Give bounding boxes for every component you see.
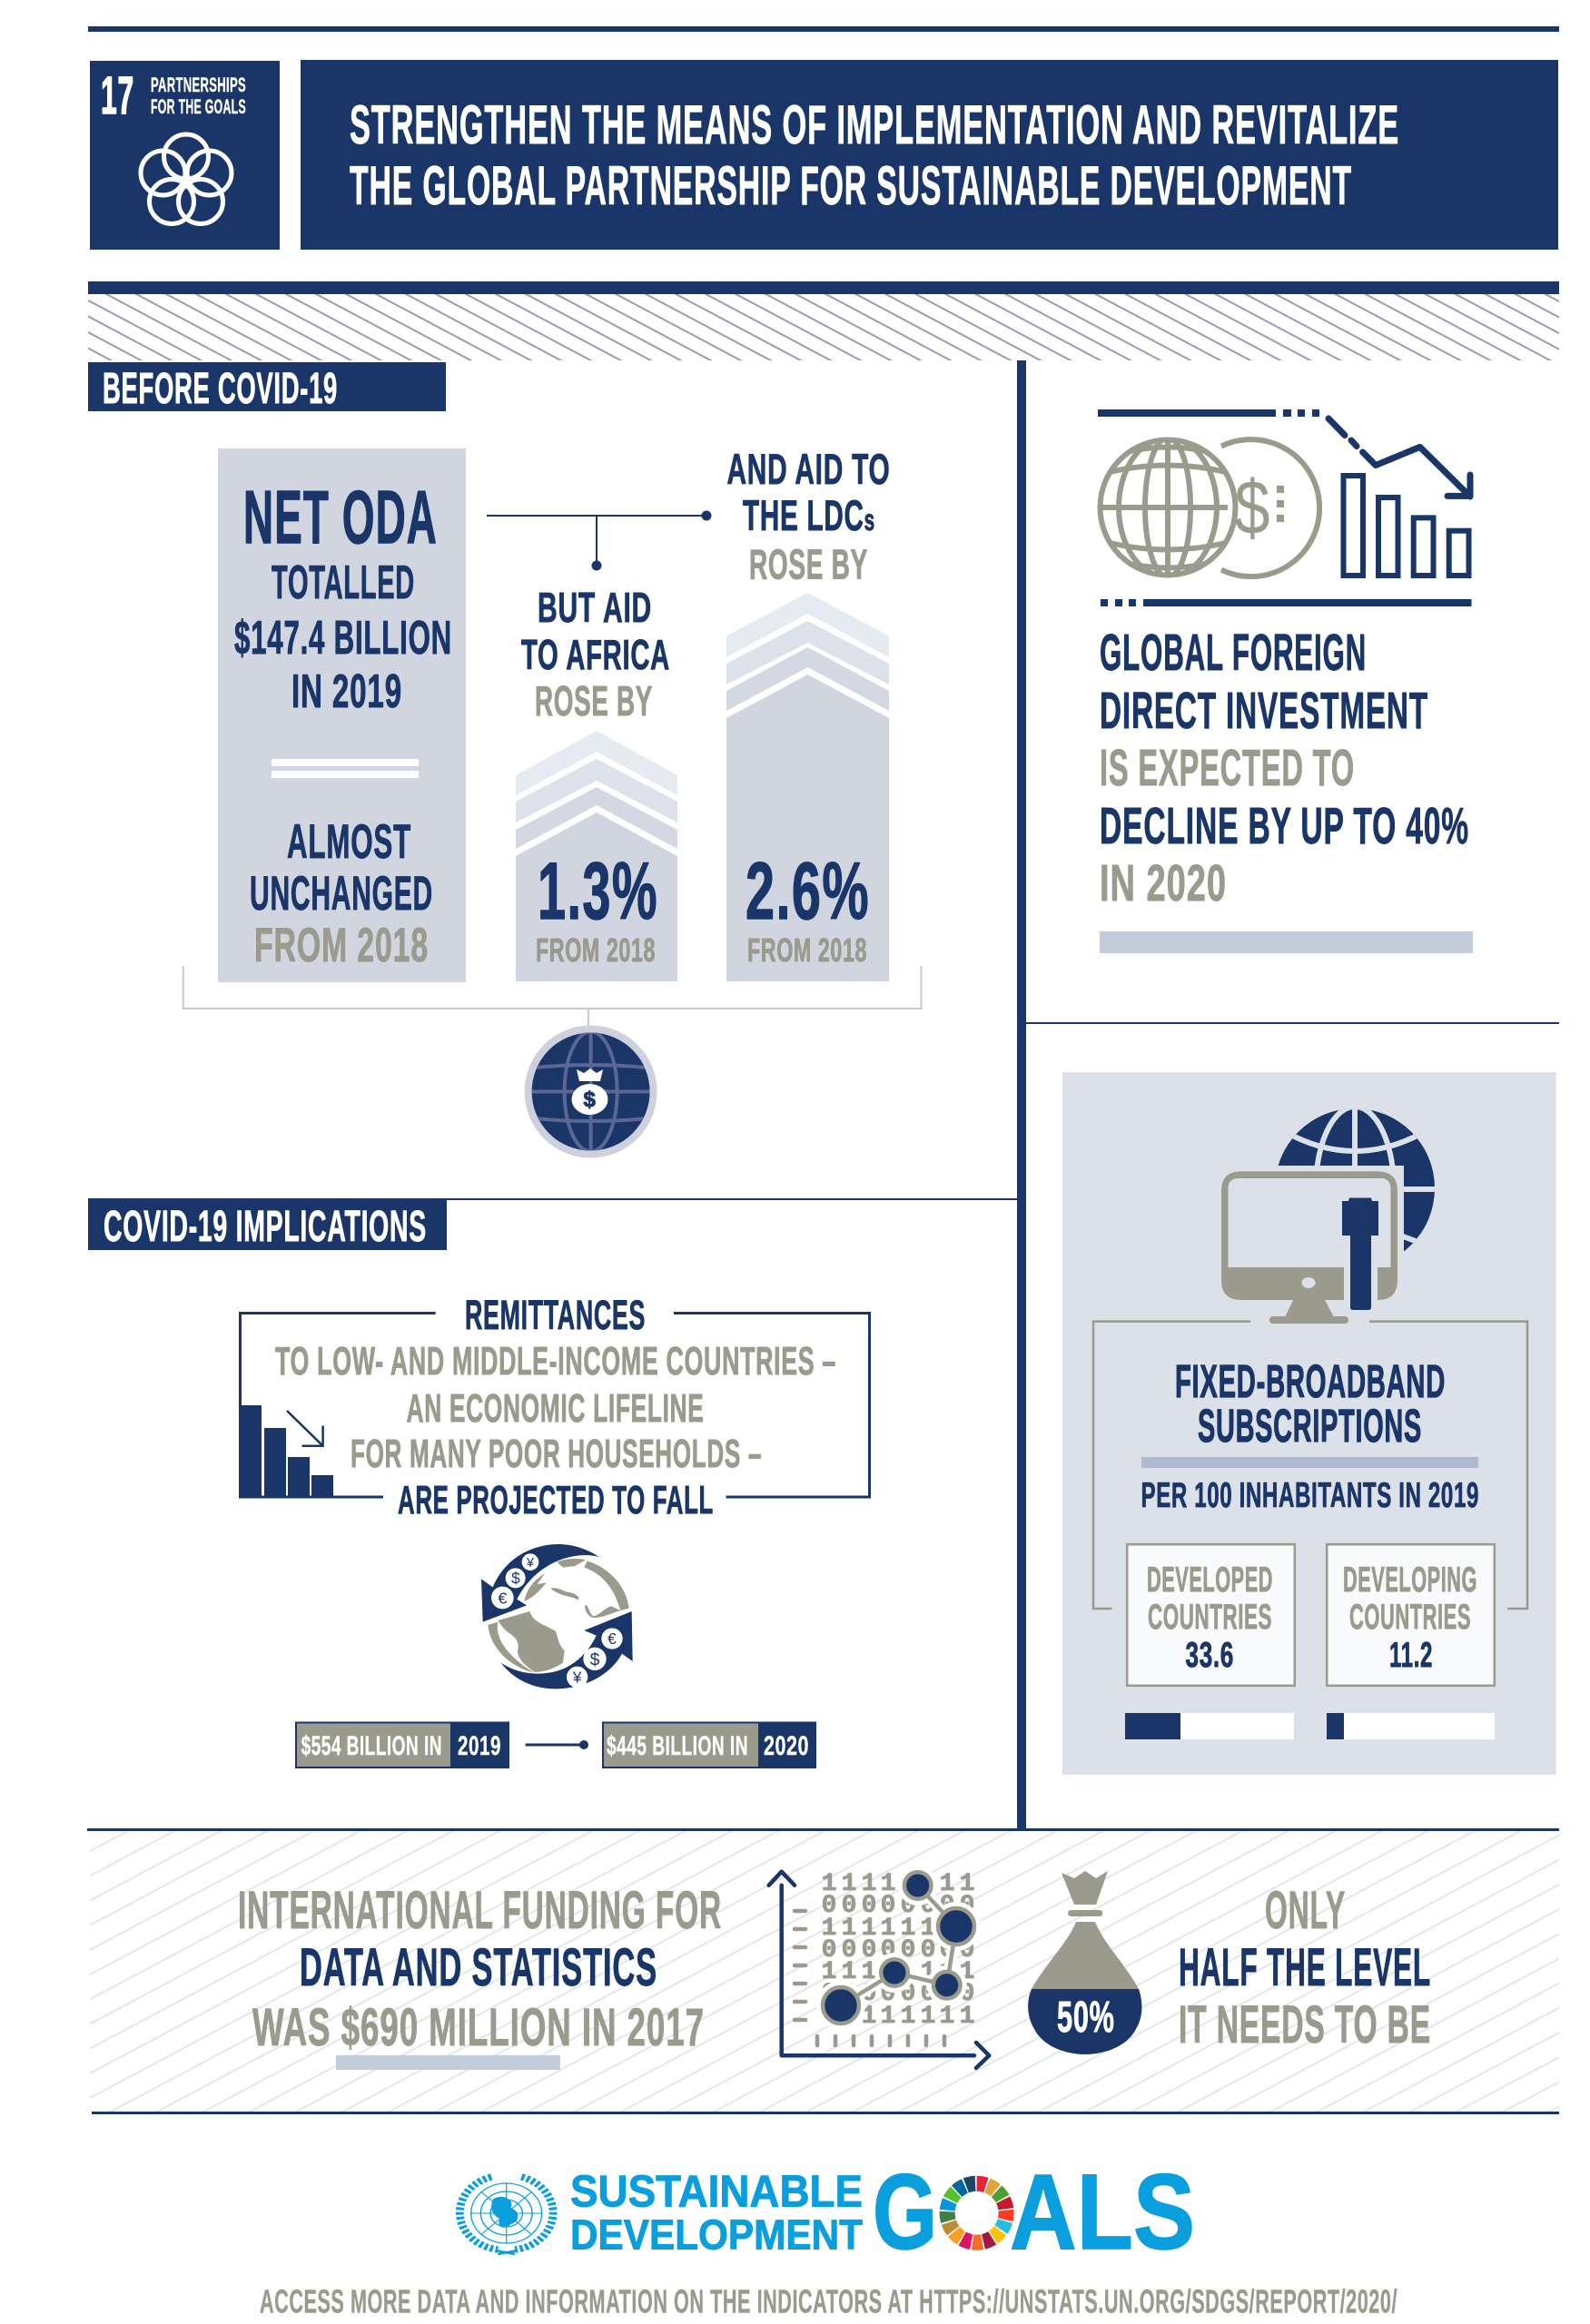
goal name — [151, 74, 246, 118]
icon: falling bars with arrow — [239, 1405, 333, 1498]
text: international funding: INTERNATIONAL FUNDING FOR — [238, 1881, 722, 1940]
panel: net oda: IN 2019 — [291, 665, 402, 718]
icon: fdi chart with globe and coin: $ — [1235, 465, 1269, 550]
card: developed countries: 33.6 — [1186, 1636, 1234, 1675]
arrow column: africa 1.3%: 1.3% — [538, 845, 658, 936]
icon: globe with circular currency arrows: ¥ — [526, 1556, 535, 1571]
heading: fixed-broadband subscriptions: SUBSCRIPTIONS — [1198, 1400, 1422, 1452]
progress bar: developing — [1327, 1713, 1495, 1739]
goal 17 badge — [90, 61, 280, 250]
icon: globe behind monitor with plug — [1219, 1107, 1439, 1324]
icon: data chart — [769, 1866, 989, 2068]
text: foreign direct investment: IS EXPECTED TO — [1100, 739, 1355, 797]
column heading: aid to the ldcs: AND AID TO — [726, 445, 890, 493]
icon: data chart: 00000000 — [822, 1980, 974, 2008]
column heading: aid to africa — [521, 584, 670, 724]
column heading: aid to the ldcs: THE LDCs — [743, 491, 875, 539]
goal number: 17 — [101, 66, 134, 125]
arrow column: ldcs 2.6% — [726, 593, 889, 981]
section label: before covid-19: BEFORE COVID-19 — [103, 365, 338, 413]
icon: globe with money bag — [528, 1029, 654, 1155]
icon: data chart: 11111111 — [822, 1958, 974, 1986]
label: 2020 remittances: 2020 — [764, 1731, 809, 1761]
text: remittances: REMITTANCES — [465, 1292, 646, 1338]
icon: globe with money bag: $ — [584, 1088, 597, 1112]
text: international funding — [238, 1881, 722, 2070]
column heading: aid to the ldcs — [726, 445, 890, 588]
card: developing countries: DEVELOPING — [1343, 1561, 1477, 1600]
heading: fixed-broadband subscriptions — [1175, 1355, 1446, 1452]
panel: net oda: UNCHANGED — [250, 867, 433, 921]
icon: globe with circular currency arrows: $ — [590, 1650, 600, 1669]
panel: net oda: $147.4 BILLION — [234, 612, 452, 665]
label: 2019 remittances: 2019 — [458, 1731, 501, 1761]
arrow between years — [526, 1740, 588, 1749]
card: developing countries: COUNTRIES — [1349, 1598, 1471, 1637]
icon: globe with circular currency arrows — [481, 1544, 633, 1689]
text: remittances: TO LOW- AND MIDDLE-INCOME COUNTRIES – — [275, 1339, 836, 1384]
icon: five interlocking rings — [141, 134, 232, 223]
card: developed countries: DEVELOPED — [1147, 1561, 1273, 1600]
icon: data chart: 00000000 — [822, 1936, 974, 1965]
text: half the level: ONLY — [1265, 1881, 1346, 1940]
text: international funding: WAS $690 MILLION IN 2017 — [252, 1998, 705, 2057]
panel: remittances frame — [239, 1292, 870, 1522]
label: 2019 remittances — [295, 1721, 509, 1768]
progress bar: developed — [1125, 1713, 1294, 1739]
text: half the level — [1179, 1881, 1431, 2054]
label: 2019 remittances: $554 BILLION IN — [301, 1731, 442, 1761]
logo: united nations emblem — [459, 2177, 553, 2254]
icon: globe with circular currency arrows: $ — [511, 1570, 520, 1588]
icon: money bag half full — [1028, 1871, 1141, 2054]
logo: sustainable development: DEVELOPMENT — [570, 2211, 863, 2259]
column heading: aid to africa: TO AFRICA — [521, 631, 670, 678]
connector from net oda to aid columns — [487, 510, 712, 570]
icon: data chart: 00000000 — [822, 1892, 974, 1920]
goal name: PARTNERSHIPS — [151, 74, 246, 96]
panel: fixed broadband — [1062, 1072, 1556, 1775]
icon: globe with circular currency arrows: € — [607, 1630, 617, 1648]
logo: goals wordmark with colour wheel: G — [873, 2152, 937, 2272]
text: remittances — [275, 1292, 836, 1522]
arrow column: africa 1.3% — [516, 731, 677, 981]
icon: fdi chart with globe and coin — [1098, 409, 1471, 606]
panel: net oda — [218, 448, 466, 982]
logo: goals wordmark with colour wheel — [873, 2152, 1195, 2272]
logo: sustainable development — [570, 2168, 863, 2259]
title banner — [301, 60, 1558, 250]
arrow column: africa 1.3%: FROM 2018 — [536, 931, 656, 969]
text: international funding: DATA AND STATISTICS — [300, 1938, 657, 1997]
column heading: aid to africa: ROSE BY — [535, 677, 653, 724]
text: remittances: AN ECONOMIC LIFELINE — [407, 1386, 705, 1431]
logo: goals wordmark with colour wheel: ALS — [1010, 2152, 1195, 2272]
logo: sustainable development: SUSTAINABLE — [570, 2168, 863, 2217]
icon: data chart: 11111111 — [822, 1870, 974, 1898]
column heading: aid to the ldcs: ROSE BY — [749, 541, 868, 588]
label: 2020 remittances: $445 BILLION IN — [607, 1731, 748, 1761]
card: developed countries: COUNTRIES — [1148, 1598, 1272, 1637]
card: developing countries: 11.2 — [1389, 1636, 1433, 1675]
bracket under columns — [183, 966, 921, 1028]
column heading: aid to africa: BUT AID — [538, 584, 652, 631]
icon: money bag half full: 50% — [1057, 1994, 1115, 2042]
panel: net oda: FROM 2018 — [254, 919, 429, 972]
icon: data chart: 11111111 — [822, 1915, 974, 1943]
icon: globe with circular currency arrows: ¥ — [572, 1669, 582, 1687]
panel: net oda: TOTALLED — [272, 556, 415, 609]
text: remittances: ARE PROJECTED TO FALL — [398, 1478, 714, 1522]
text: foreign direct investment: GLOBAL FOREIGN — [1100, 624, 1367, 682]
icon: globe with circular currency arrows: € — [498, 1589, 507, 1607]
card: developed countries — [1127, 1544, 1295, 1686]
icon: data chart: 11111111 — [822, 2003, 974, 2031]
text: foreign direct investment — [1100, 624, 1469, 912]
panel: net oda: ALMOST — [287, 815, 411, 869]
arrow column: ldcs 2.6%: 2.6% — [746, 845, 870, 936]
section label: covid-19 implications: COVID-19 IMPLICATIONS — [104, 1203, 427, 1251]
arrow column: ldcs 2.6%: FROM 2018 — [747, 931, 867, 969]
bracket — [1093, 1322, 1527, 1609]
label: 2020 remittances — [602, 1721, 816, 1768]
text: foreign direct investment: IN 2020 — [1100, 854, 1227, 912]
panel: net oda: NET ODA — [243, 475, 438, 559]
card: developing countries — [1327, 1544, 1495, 1686]
text: remittances: FOR MANY POOR HOUSEHOLDS – — [351, 1432, 762, 1476]
goal name: FOR THE GOALS — [151, 95, 246, 118]
section label: covid-19 implications — [88, 1200, 447, 1251]
